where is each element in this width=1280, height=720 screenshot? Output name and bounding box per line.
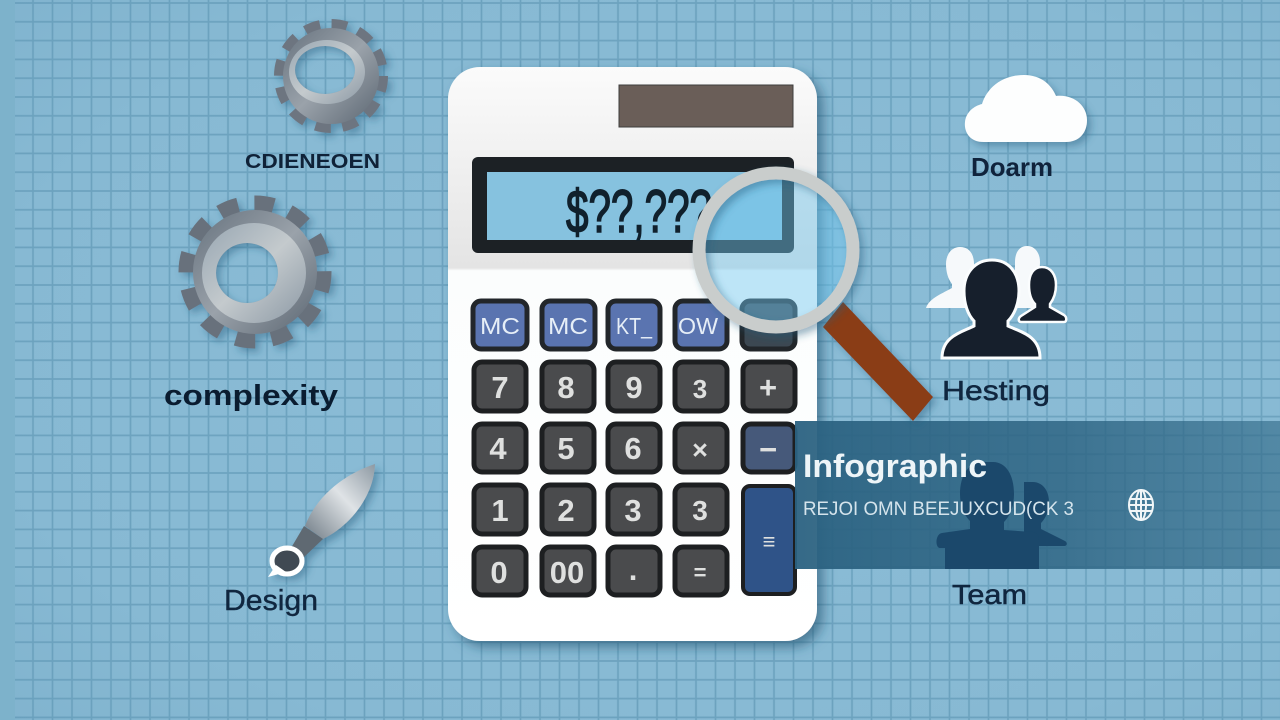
- key labels: ×: [692, 435, 708, 465]
- banner subtitle: REJOI OMN BEEJUXCUD(CK 3: [803, 499, 1074, 520]
- key labels: .: [629, 552, 637, 587]
- label: complexity: complexity: [164, 380, 338, 412]
- person silhouette in banner: [936, 462, 1067, 570]
- label: team: Team: [952, 579, 1027, 610]
- magnifier lens: [704, 178, 848, 322]
- function keys: KT_: [616, 313, 653, 339]
- key labels: ≡: [763, 529, 775, 554]
- function keys: [473, 301, 795, 349]
- icon: large gear: [188, 205, 322, 339]
- label: design: Design: [224, 585, 318, 617]
- key labels: 00: [550, 555, 584, 590]
- key labels: 1: [491, 493, 509, 528]
- info banner: [795, 421, 1280, 570]
- key labels: 6: [624, 431, 642, 466]
- calculator body: [448, 67, 817, 641]
- key labels: 2: [557, 493, 575, 528]
- function keys: MC: [548, 313, 588, 339]
- key labels: 8: [557, 370, 575, 405]
- icon: globe: [1129, 490, 1153, 520]
- function keys: MC: [480, 313, 520, 339]
- icon: people group: [926, 246, 1066, 358]
- icon: paint brush: [268, 464, 375, 577]
- key labels: 9: [625, 370, 643, 405]
- icon: small gear: [281, 26, 381, 126]
- calculator: [448, 67, 817, 641]
- banner title: Infographic: [803, 448, 987, 484]
- key labels: [489, 370, 777, 590]
- display: $??,???: [566, 178, 712, 245]
- solar panel: [619, 85, 793, 127]
- magnifying glass: [699, 173, 933, 421]
- label: cloud: Doarm: [971, 152, 1053, 182]
- key labels: 3: [693, 374, 707, 404]
- magnifier handle: [823, 302, 933, 421]
- key labels: 4: [489, 431, 507, 466]
- key labels: 7: [491, 370, 509, 405]
- key labels: 0: [490, 555, 508, 590]
- key labels: 5: [557, 431, 575, 466]
- display: [472, 157, 794, 253]
- key labels: +: [759, 370, 777, 405]
- number keys: [474, 362, 795, 595]
- key labels: 3: [692, 495, 708, 526]
- function keys: OW: [678, 313, 718, 339]
- key labels: 3: [624, 493, 642, 528]
- blue equals key: [743, 486, 795, 594]
- icon: cloud: [965, 75, 1087, 142]
- label: top left gear: CDIENEOEN: [245, 151, 380, 173]
- magnifier rim: [699, 173, 853, 327]
- key labels: =: [694, 560, 706, 585]
- label: hosting: Hesting: [942, 375, 1050, 406]
- key labels: −: [759, 432, 777, 467]
